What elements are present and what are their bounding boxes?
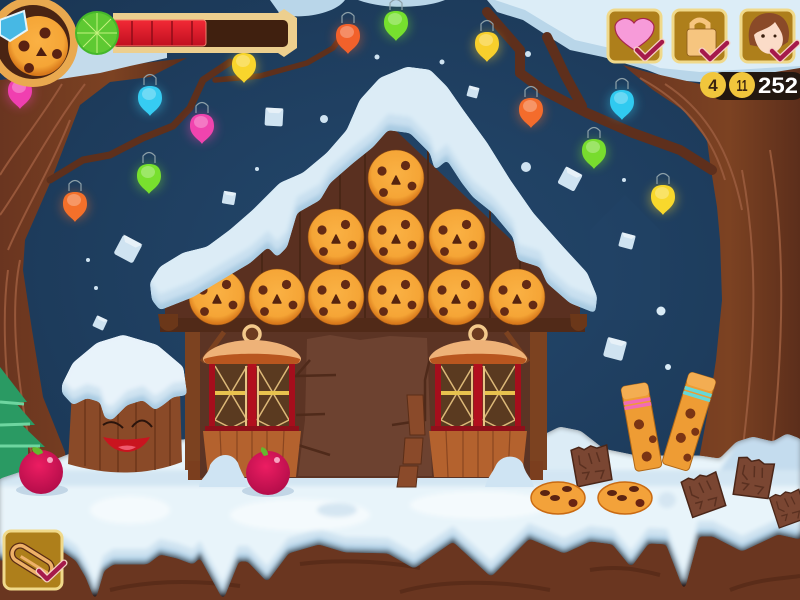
HUD: score counters: 252 (758, 73, 798, 98)
house gable wall (165, 125, 580, 332)
HUD: character portrait badge (741, 10, 797, 62)
corner braces (202, 332, 528, 362)
snow mounds at house base (199, 455, 534, 487)
HUD: score counters: 4 (708, 76, 718, 95)
HUD: cookie avatar badge (0, 0, 78, 87)
faint background house silhouette (590, 195, 660, 320)
smiling stump with snow cap (62, 321, 187, 473)
cookies on the gable (189, 150, 545, 325)
left tree snow under HUD (55, 40, 167, 80)
right tree (487, 12, 800, 480)
upper branch (215, 30, 346, 80)
left tree (0, 30, 346, 490)
HUD: paperclip badge (4, 531, 64, 589)
door wall (200, 330, 530, 478)
snowy roof (150, 51, 597, 313)
cookie sticks (621, 372, 716, 472)
icon: lime (75, 11, 119, 55)
chocolate pieces (571, 444, 800, 528)
icon: blue scarf (0, 11, 27, 41)
roof brackets (158, 314, 587, 331)
pine tree (0, 367, 45, 482)
HUD: heart badge (608, 10, 662, 62)
wall cracks (296, 358, 430, 455)
apples (16, 447, 294, 497)
broken plank pile (397, 395, 425, 487)
snow ground (0, 414, 800, 597)
thin branch (487, 12, 712, 170)
gingerbread house (158, 125, 587, 487)
fork branch (547, 37, 582, 106)
HUD: score counters: 11 (736, 78, 748, 95)
HUD: score counters (700, 72, 800, 100)
ground cookies (531, 482, 652, 514)
falling snow cubes (86, 51, 671, 370)
top snow canopy (270, 0, 800, 82)
HUD: lock badge (673, 10, 727, 62)
wall posts (185, 325, 547, 470)
lower branch (50, 62, 230, 180)
windows (203, 326, 527, 477)
house wood planks (230, 150, 520, 325)
post feet (188, 461, 543, 480)
plaster patch (298, 335, 432, 476)
roof beam (160, 318, 585, 332)
string lights (6, 0, 677, 222)
bottom brown ledge (0, 525, 800, 600)
HUD: progress bar (75, 9, 297, 57)
